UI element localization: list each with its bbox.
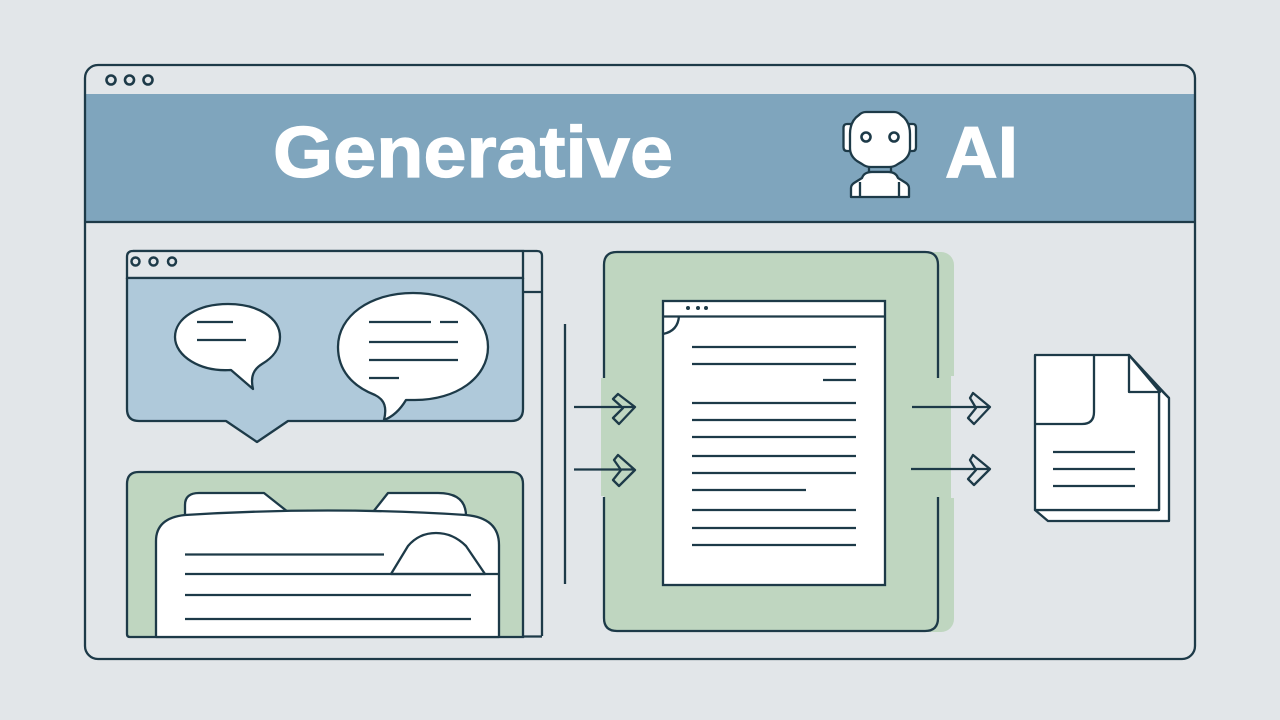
panel: green document stage [601, 252, 955, 632]
title: Generative: Generative [273, 113, 673, 193]
folder body [156, 510, 499, 637]
panel: chat window [127, 251, 542, 636]
window dots [132, 258, 176, 266]
arrow: input top [574, 394, 635, 424]
title: AI: AI [945, 113, 1018, 193]
folder tabs [185, 493, 466, 516]
large speech bubble [338, 293, 488, 420]
window control dots [106, 76, 152, 84]
folder hump [391, 533, 485, 574]
small speech bubble [175, 304, 280, 389]
arrow: output bottom [911, 455, 990, 485]
arrow: output top [912, 393, 990, 424]
icon: robot [844, 112, 916, 197]
arrow: input bottom [574, 455, 635, 486]
header band [86, 94, 1194, 222]
folder text lines [185, 554, 499, 619]
divider line [564, 324, 566, 584]
panel: green folder [127, 472, 542, 637]
browser window frame [85, 65, 1195, 659]
icon: output document [1035, 355, 1169, 521]
document [663, 301, 885, 585]
